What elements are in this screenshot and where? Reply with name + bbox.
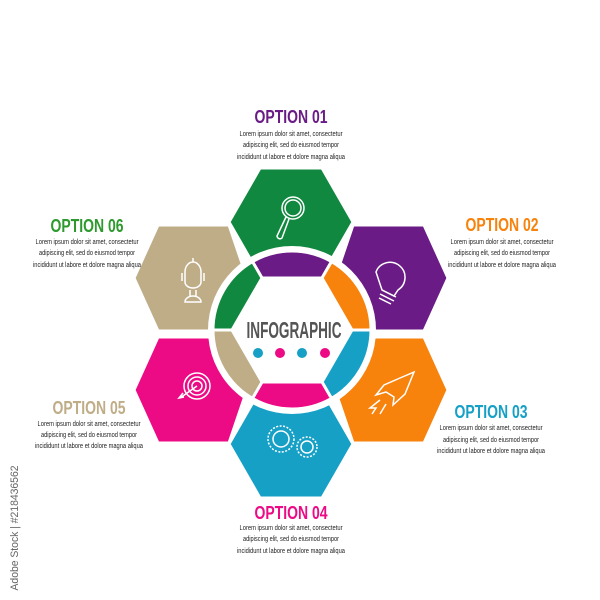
text: option 06: adipiscing elit, sed do eiusmod tempor: [39, 250, 136, 257]
hexagon: option 04 blue: [229, 390, 353, 498]
text: option 02: adipiscing elit, sed do eiusmod tempor: [454, 250, 551, 257]
text: option 03: adipiscing elit, sed do eiusmod tempor: [443, 437, 540, 444]
text: option 02: Lorem ipsum dolor sit amet, consectetur: [450, 239, 554, 246]
text: option 04: OPTION 04: [254, 503, 328, 523]
icon: magnifier: [277, 197, 304, 239]
text: option 04: adipiscing elit, sed do eiusmod tempor: [243, 536, 340, 543]
text: option 04: [237, 503, 345, 555]
text: option 05: OPTION 05: [52, 398, 126, 418]
text: option 01: adipiscing elit, sed do eiusmod tempor: [243, 142, 340, 149]
hexagon: option 05 pink: [134, 337, 247, 443]
text: option 04: incididunt ut labore et dolore magna aliqua: [237, 548, 345, 555]
text: option 04: Lorem ipsum dolor sit amet, consectetur: [240, 525, 343, 532]
text: option 02: incididunt ut labore et dolore magna aliqua: [448, 262, 556, 269]
hexagon: option 02 purple: [335, 225, 448, 331]
text: option 06: OPTION 06: [50, 216, 124, 236]
text: option 03: OPTION 03: [454, 402, 528, 422]
text: option 03: [437, 402, 545, 455]
center title: INFOGRAPHIC: [246, 317, 342, 343]
text: option 02: [448, 215, 556, 269]
text: option 05: Lorem ipsum dolor sit amet, consectetur: [38, 421, 141, 428]
text: option 01: Lorem ipsum dolor sit amet, consectetur: [240, 131, 343, 138]
text: option 01: [237, 107, 345, 161]
text: option 06: Lorem ipsum dolor sit amet, consectetur: [36, 239, 139, 246]
text: option 03: Lorem ipsum dolor sit amet, consectetur: [440, 425, 543, 432]
text: option 01: incididunt ut labore et dolore magna aliqua: [237, 154, 345, 161]
hexagon: option 06 tan: [134, 225, 247, 331]
icon: target: [179, 373, 210, 399]
text: option 02: OPTION 02: [466, 215, 538, 235]
icon: gears: [268, 426, 317, 457]
icon: robot headset: [182, 258, 204, 302]
text: option 03: incididunt ut labore et dolore magna aliqua: [437, 448, 545, 455]
text: option 05: adipiscing elit, sed do eiusmod tempor: [41, 432, 138, 439]
hexagon: option 03 orange: [335, 337, 448, 443]
text: option 06: [33, 216, 141, 269]
text: option 06: incididunt ut labore et dolore magna aliqua: [33, 262, 141, 269]
watermark id text: Adobe Stock | #218436562: [9, 466, 21, 590]
icon: light bulb: [376, 262, 405, 304]
hexagon: option 01 green: [229, 168, 353, 276]
text: option 05: [35, 398, 143, 450]
text: option 01: OPTION 01: [254, 107, 328, 127]
center dots: [253, 348, 330, 358]
center ring: [208, 246, 376, 414]
icon: rocket: [370, 372, 414, 414]
text: option 05: incididunt ut labore et dolore magna aliqua: [35, 443, 143, 450]
